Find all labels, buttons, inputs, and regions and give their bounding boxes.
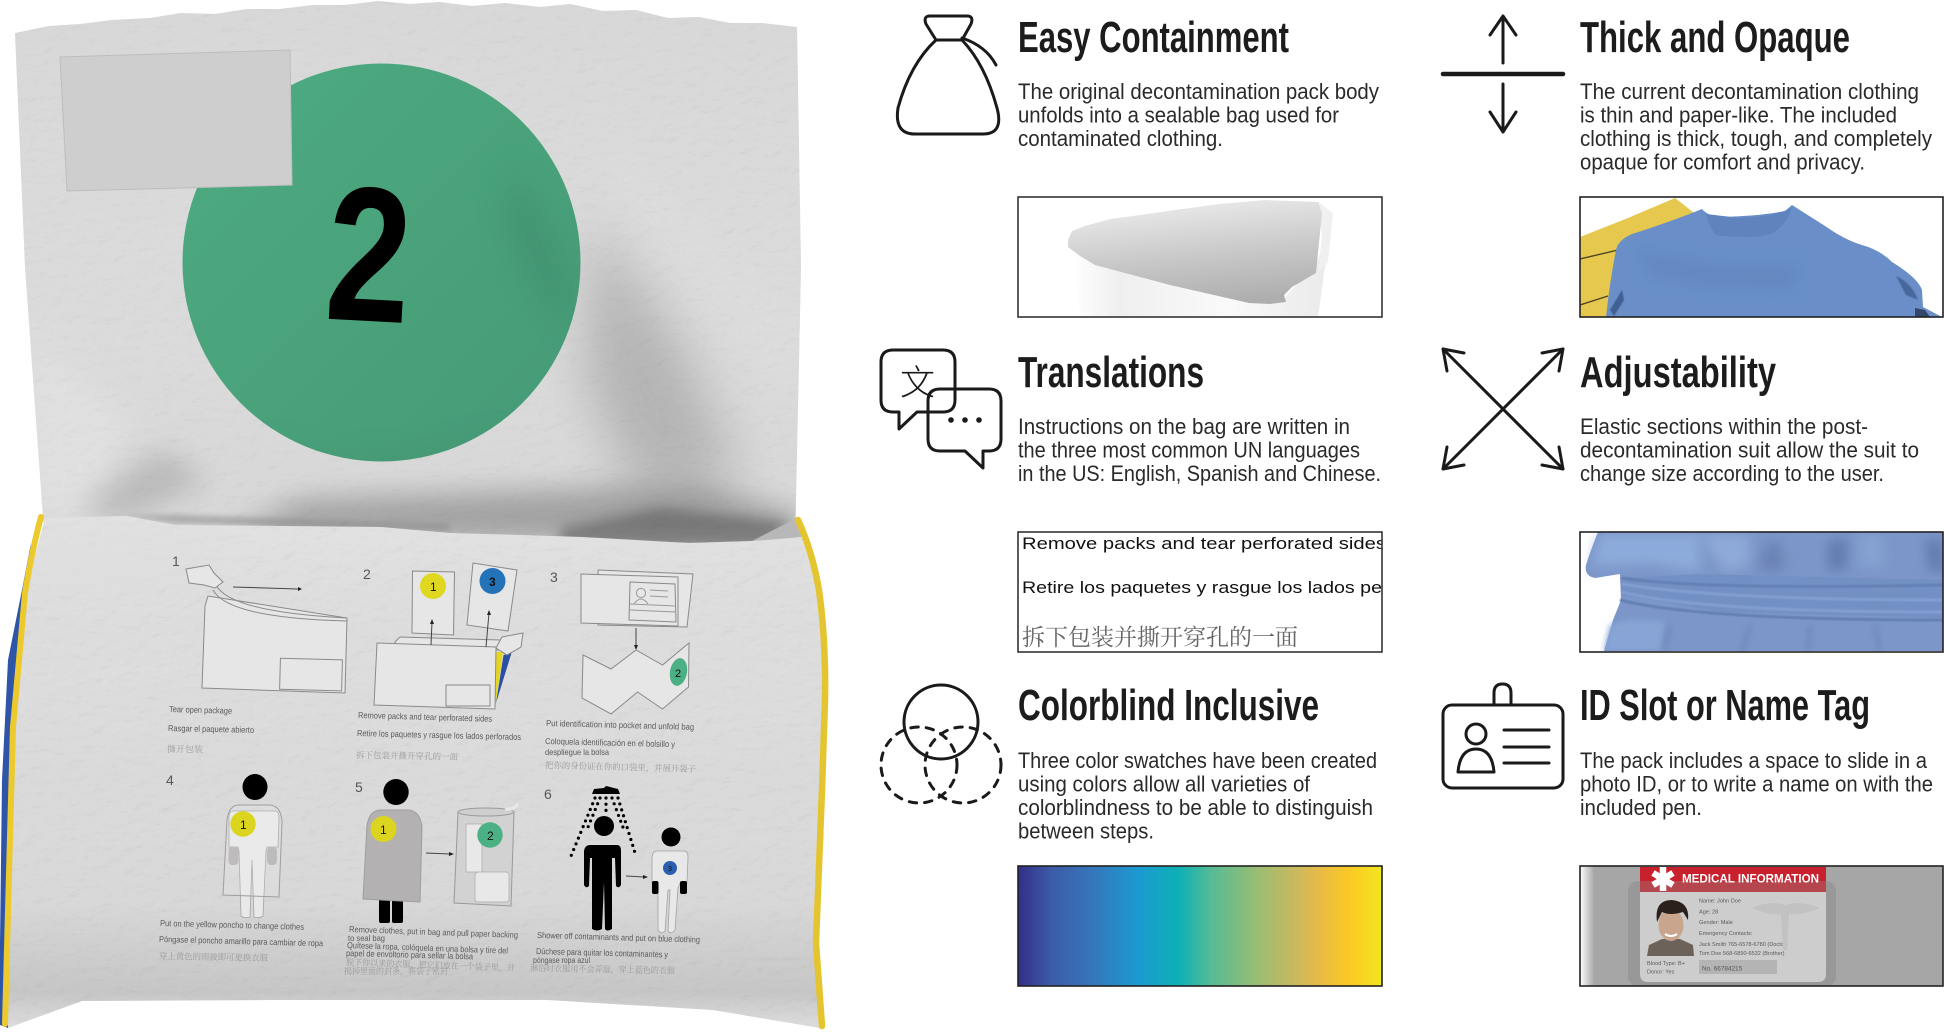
card data: Name: John Doe [1699, 898, 1741, 904]
printed step 6: Shower off contaminants and put on blue clothing [537, 930, 700, 945]
ID slot rectangle on flap [60, 50, 292, 191]
heading: Easy Containment [1018, 13, 1289, 62]
panel: ID Slot or Name Tag [1443, 681, 1943, 986]
card data: Tom Doe 568-6890-6532 (Brother) [1699, 951, 1785, 957]
card data: Jack Smith 765-6578-6780 (Doctor) [1699, 942, 1788, 948]
printed step 3: 2 [675, 668, 681, 680]
card data: Donor: Yes [1647, 970, 1675, 976]
panel: Colorblind Inclusive [881, 681, 1382, 986]
description: Three color swatches have been created [1018, 748, 1377, 773]
description: opaque for comfort and privacy. [1580, 150, 1865, 174]
panel: Adjustability [1443, 348, 1943, 652]
printed step 2: 2 [363, 566, 371, 582]
bag front pocket [0, 510, 830, 1030]
printed step 2: 1 [430, 580, 437, 594]
icon: thickness arrows [1443, 16, 1563, 132]
description: using colors allow all varieties of [1018, 772, 1311, 796]
image: opened bag [1018, 197, 1382, 317]
description: decontamination suit allow the suit to [1580, 438, 1919, 462]
printed step 5: to seal bag [348, 933, 385, 943]
printed step 4: Put on the yellow poncho to change clothes [160, 918, 304, 932]
printed step 5 [344, 779, 518, 977]
portrait photo [1647, 939, 1694, 956]
printed step 2 [356, 563, 523, 762]
card red header [1640, 867, 1826, 881]
description: colorblindness to be able to distinguish [1018, 795, 1373, 820]
description: The current decontamination clothing [1580, 79, 1919, 104]
card data: Emergency Contacts: [1699, 931, 1753, 937]
card data: Blood Type: B+ [1647, 961, 1685, 967]
printed step 3: Put identification into pocket and unfold bag [546, 718, 694, 732]
star of life [1653, 867, 1673, 891]
panel: Thick and Opaque [1443, 13, 1943, 317]
description: Elastic sections within the post- [1580, 414, 1868, 439]
printed step 6: 3 [668, 866, 672, 873]
description [1018, 414, 1381, 486]
printed step 2: 拆下包装并撕开穿孔的一面 [356, 749, 459, 762]
heading: Adjustability [1580, 348, 1776, 397]
yellow left seam [5, 517, 41, 1024]
step 3 zigzag bag [582, 643, 689, 714]
printed step 3: 3 [550, 569, 558, 585]
icon: overlapping circles [881, 685, 1001, 803]
card data: Gender: Male [1699, 920, 1733, 926]
printed step 4: 4 [166, 772, 174, 788]
printed step 3 [545, 569, 697, 775]
description: the three most common UN languages [1018, 438, 1360, 462]
card data [1647, 898, 1788, 976]
printed step 6: 6 [544, 786, 552, 802]
description [1018, 748, 1377, 844]
image: elastic waistband [1580, 532, 1943, 652]
printed step 4: 1 [240, 818, 247, 832]
printed step 6: Dúchese para quitar los contaminantes y [536, 946, 669, 959]
printed step 5: 2 [487, 829, 494, 843]
printed step 4 [159, 772, 323, 963]
description: is thin and paper-like. The included [1580, 102, 1897, 128]
printed step 5: 揭掉里面的封条，将袋子密封 [344, 965, 448, 977]
heading: Translations [1018, 348, 1204, 397]
printed step 2: Retire los paquetes y rasgue los lados perforados [357, 728, 521, 742]
description: Instructions on the bag are written in [1018, 414, 1350, 439]
step 5 figure in grey poncho [383, 779, 409, 805]
description: between steps. [1018, 818, 1154, 844]
printed step 5: papel de envoltorio para sellar la bolsa [346, 948, 473, 961]
step 1 package [202, 596, 347, 693]
printed step 1: 撕开包装 [167, 743, 203, 754]
interior facet at right of pocket [752, 519, 803, 541]
colour gradient swatch [1018, 866, 1382, 986]
card body [1640, 892, 1826, 982]
green step circle with number 2 [60, 50, 580, 470]
icon: speech bubbles: 文 [900, 355, 935, 406]
caduceus watermark [1752, 903, 1820, 950]
image: medical ID card in slot [1580, 866, 1943, 986]
step 5 sealed bag [454, 812, 514, 906]
printed step 6: 淋浴时衣服用不会弄湿，穿上蓝色的衣服 [530, 962, 676, 977]
step 4 figure in poncho [242, 774, 268, 800]
description: in the US: English, Spanish and Chinese. [1018, 461, 1381, 486]
printed step 4: Póngase el poncho amarillo para cambiar de ropa [159, 934, 323, 948]
step 6 showering figure [594, 816, 614, 836]
image: trilingual instruction text: Retire los paquetes y rasgue los lados perforados [1022, 579, 1454, 597]
printed step 4: 穿上黄色的雨披即可更换衣服 [159, 950, 269, 963]
image: medical ID card in slot: No. 66784215 [1702, 966, 1743, 972]
card data: Age: 28 [1699, 910, 1718, 916]
description [1018, 79, 1379, 151]
description [1580, 748, 1933, 820]
printed step 5: Quítese la ropa, colóquela en una bolsa y tire del [347, 940, 508, 956]
panel: Translations [881, 348, 1454, 652]
printed step 5: 5 [355, 779, 363, 795]
description [1580, 79, 1932, 174]
blue side of the bag [0, 543, 31, 1028]
printed step 5: 脱下你以来的衣服，把它们放在一个袋子里，并 [346, 956, 516, 974]
icon: ID badge [1443, 684, 1563, 788]
yellow right seam [798, 520, 825, 1026]
printed step 2: 3 [489, 575, 496, 589]
printed step 6: póngase ropa azul [533, 955, 590, 965]
icon: four-way arrows [1443, 349, 1563, 469]
printed step 3: Coloquela identificación en el bolsillo y [545, 736, 676, 749]
printed step 3: 把你的身份证在你的口袋里，并展开袋子 [545, 759, 697, 775]
panel: opened decontamination bag render [0, 0, 830, 1030]
description: The original decontamination pack body [1018, 79, 1379, 104]
step 6 clean figure [662, 828, 680, 846]
description: included pen. [1580, 795, 1702, 820]
description: change size according to the user. [1580, 461, 1884, 486]
image: trilingual instruction text: Remove packs and tear perforated sides [1022, 535, 1386, 553]
description: unfolds into a sealable bag used for [1018, 102, 1339, 128]
image: trilingual instruction text: 拆下包装并撕开穿孔的一面 [1022, 625, 1298, 650]
step 2 pack cards [412, 571, 454, 635]
bag back flap [0, 0, 830, 548]
printed step 5: Remove clothes, put in bag and pull paper backing [349, 924, 518, 940]
step 6 shower head and water [592, 786, 620, 794]
image: medical ID card in slot: MEDICAL INFORMATION [1682, 872, 1819, 886]
number 2: 2 [321, 145, 417, 364]
printed step 1: Rasgar el paquete abierto [168, 723, 254, 735]
printed step 5: 1 [380, 823, 387, 837]
icon: drawstring bag [897, 16, 999, 134]
printed step 6 [530, 786, 700, 977]
panel: Easy Containment [897, 13, 1382, 317]
image: trilingual instruction text [1017, 531, 1383, 653]
image: blue shirt on yellow layer [1580, 197, 1943, 317]
description [1580, 414, 1919, 486]
printed step 1 [167, 553, 347, 754]
step 3 folder with ID [598, 570, 693, 627]
printed step 1: Tear open package [169, 704, 232, 716]
icon: speech bubbles [881, 350, 1001, 468]
heading: Colorblind Inclusive [1018, 681, 1319, 730]
printed step 2: Remove packs and tear perforated sides [358, 710, 492, 724]
printed step 3: despliegue la bolsa [545, 747, 609, 757]
description: contaminated clothing. [1018, 126, 1223, 151]
printed step 1: 1 [172, 553, 180, 569]
